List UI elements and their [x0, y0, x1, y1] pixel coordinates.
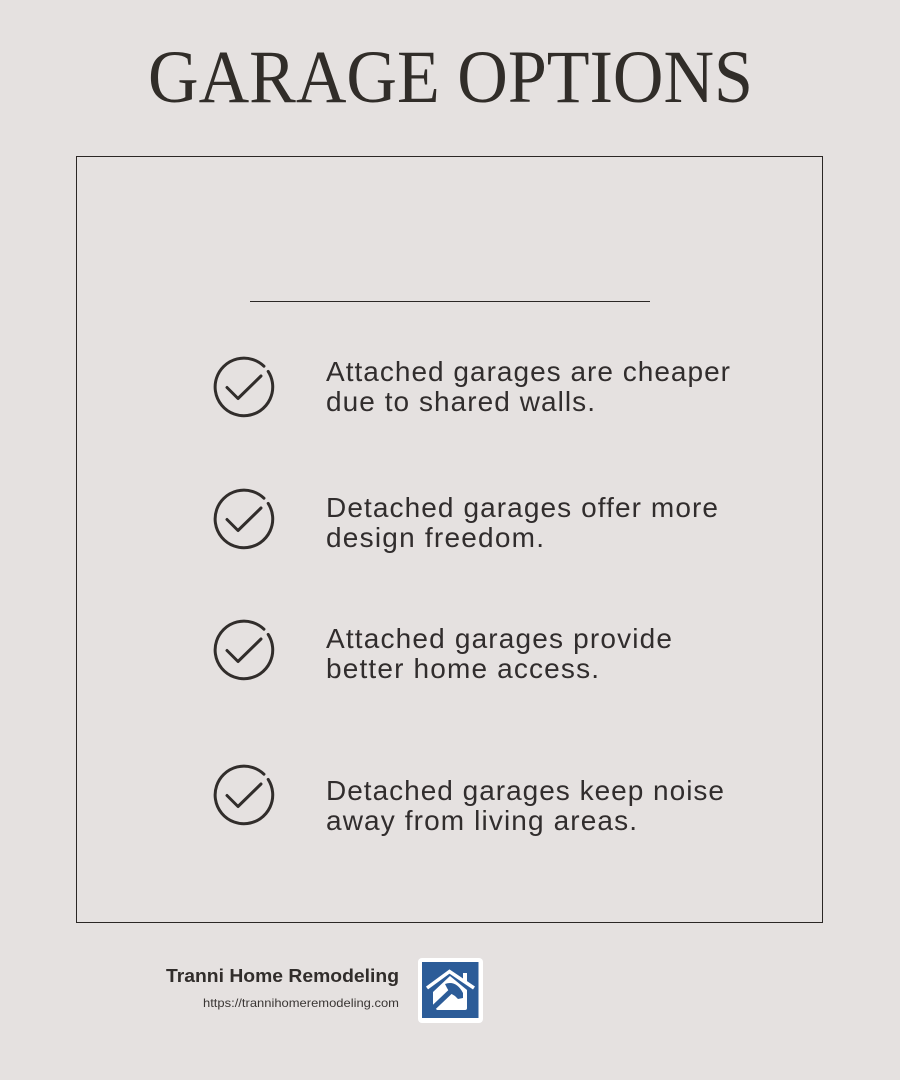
icon: check mark 4: [215, 766, 273, 824]
text: detached design freedom: design freedom.: [326, 522, 544, 553]
text: detached noise: Detached garages keep noise: [326, 775, 724, 806]
panel: garage comparison: [76, 156, 822, 922]
text: attached cheaper: due to shared walls.: [326, 386, 595, 417]
icon: check mark 3: [215, 621, 273, 679]
icon: check mark 2: [215, 490, 273, 548]
text: detached noise: away from living areas.: [326, 805, 637, 836]
icon: company logo: [418, 958, 483, 1023]
text: detached design freedom: Detached garages offer more: [326, 492, 718, 523]
text: attached home access: better home access.: [326, 653, 599, 684]
company url: https://trannihomeremodeling.com: [203, 996, 399, 1010]
company name: Tranni Home Remodeling: [166, 965, 399, 986]
text: attached cheaper: Attached garages are cheaper: [326, 356, 730, 387]
title: GARAGE OPTIONS: [148, 36, 753, 119]
text: attached home access: Attached garages provide: [326, 623, 672, 654]
icon: check mark 1: [215, 358, 273, 416]
